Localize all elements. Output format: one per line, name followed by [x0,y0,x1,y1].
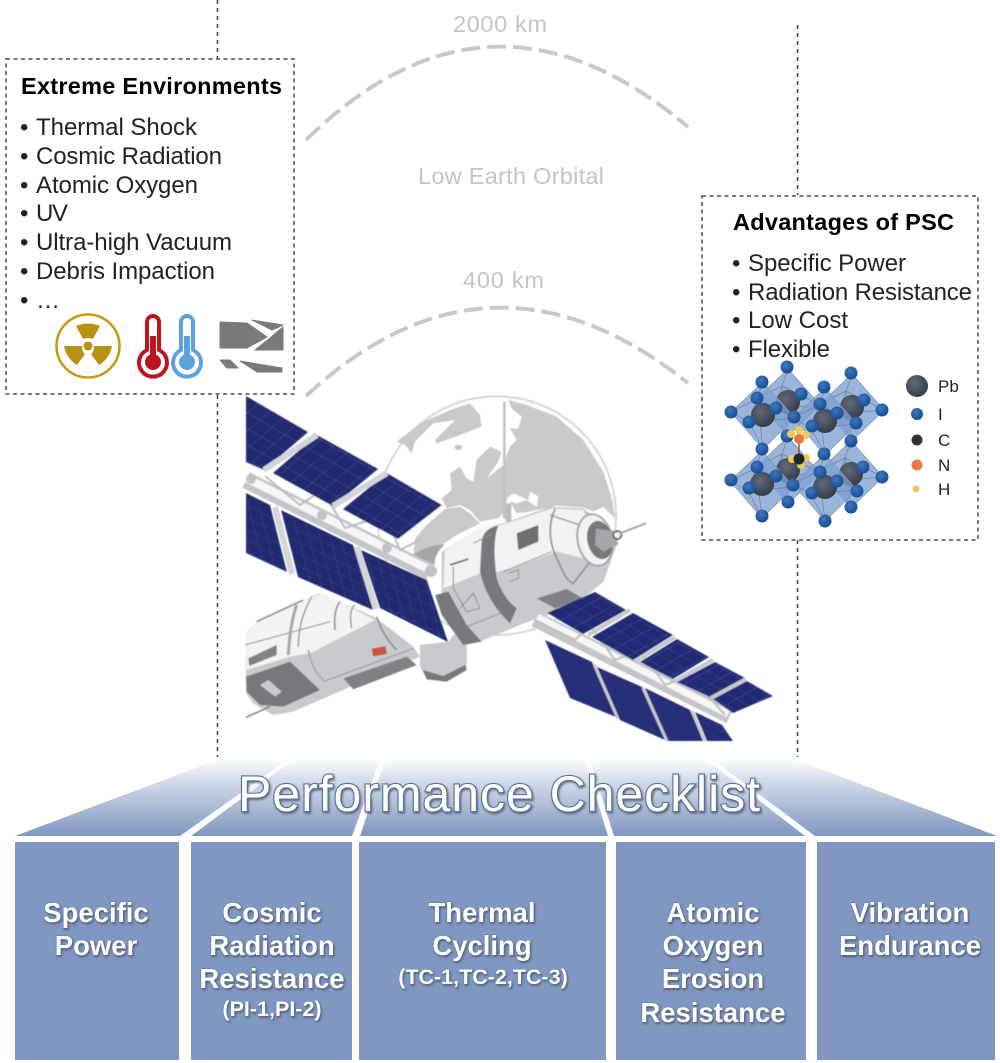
box: Cosmic Radiation Resistance [191,842,352,1060]
list: advantages: • [732,307,740,334]
box: Atomic Oxygen Erosion Resistance: Atomic [666,897,760,928]
label: Low Earth Orbital: Low Earth Orbital [418,163,604,189]
list: environments: UV [36,200,68,227]
box: Cosmic Radiation Resistance: Radiation [209,930,335,961]
icon: debris [220,320,283,372]
icon: radiation [56,314,120,378]
legend: atoms: H [938,480,950,499]
box: Thermal Cycling: Cycling [432,930,532,961]
list: advantages: Flexible [748,336,830,363]
legend: atoms: C [938,431,950,450]
list: advantages: Low Cost [748,307,848,334]
box: Vibration Endurance [817,842,995,1060]
list: environments: • [20,287,28,314]
icon: cold thermometer [173,316,201,377]
list: environments: • [20,229,28,256]
icon: hot thermometer [139,316,167,377]
box: Vibration Endurance: Endurance [839,930,981,961]
legend: atoms: N [938,456,950,475]
solar wing: lower right [535,592,773,741]
box: Specific Power [15,842,179,1060]
heading: Advantages of PSC: Advantages of PSC [733,209,954,235]
list: advantages [732,250,972,363]
list: advantages: • [732,336,740,363]
box: Specific Power: Power [55,930,138,961]
orbit arc: 400 km [306,308,688,396]
box: Cosmic Radiation Resistance: (PI-1,PI-2) [222,997,322,1021]
perovskite crystal structure [724,360,888,528]
label: 400 km: 400 km [463,267,544,293]
list: environments: • [20,172,28,199]
box: Thermal Cycling: (TC-1,TC-2,TC-3) [398,965,568,989]
legend: atoms: Pb [938,377,959,396]
list: environments: Atomic Oxygen [36,172,198,199]
satellite illustration with globe [245,396,773,741]
list: advantages: • [732,250,740,277]
panel: Advantages of PSC [702,196,978,540]
box: Specific Power: Specific [43,897,149,928]
list: advantages: • [732,279,740,306]
list: environments: Debris Impaction [36,258,215,285]
list: environments: • [20,143,28,170]
box: Atomic Oxygen Erosion Resistance: Oxygen [663,930,763,961]
orbit arc: 2000 km [306,47,688,140]
list: environments: Ultra-high Vacuum [36,229,232,256]
list: environments [20,114,232,314]
legend: atoms: I [938,405,943,424]
box: Thermal Cycling: Thermal [429,897,535,928]
list: environments: • [20,200,28,227]
box: Vibration Endurance: Vibration [851,897,969,928]
list: advantages: Radiation Resistance [748,279,972,306]
box: Atomic Oxygen Erosion Resistance: Resistance [640,997,786,1028]
dashed guide lines [218,0,798,757]
label: 2000 km: 2000 km [453,11,547,37]
module: main cylinder [413,507,646,645]
list: environments: • [20,258,28,285]
list: advantages: Specific Power [748,250,906,277]
box: Cosmic Radiation Resistance: Resistance [199,963,345,994]
globe [377,396,616,635]
box: Cosmic Radiation Resistance: Cosmic [222,897,322,928]
list: environments: Cosmic Radiation [36,143,222,170]
module: rear cylinder [245,593,467,717]
list: environments: • [20,114,28,141]
box: Atomic Oxygen Erosion Resistance: Erosion [662,963,764,994]
legend: atoms [906,375,959,499]
list: environments: … [36,287,60,314]
panel: Extreme Environments [6,59,294,394]
roof: performance checklist header [15,760,997,836]
heading: Performance Checklist: Performance Checklist [238,766,760,822]
box: Thermal Cycling [359,842,606,1060]
box: Atomic Oxygen Erosion Resistance [616,842,806,1060]
list: environments: Thermal Shock [36,114,198,141]
heading: Extreme Environments: Extreme Environments [21,73,282,99]
solar wing: upper left [246,396,448,642]
